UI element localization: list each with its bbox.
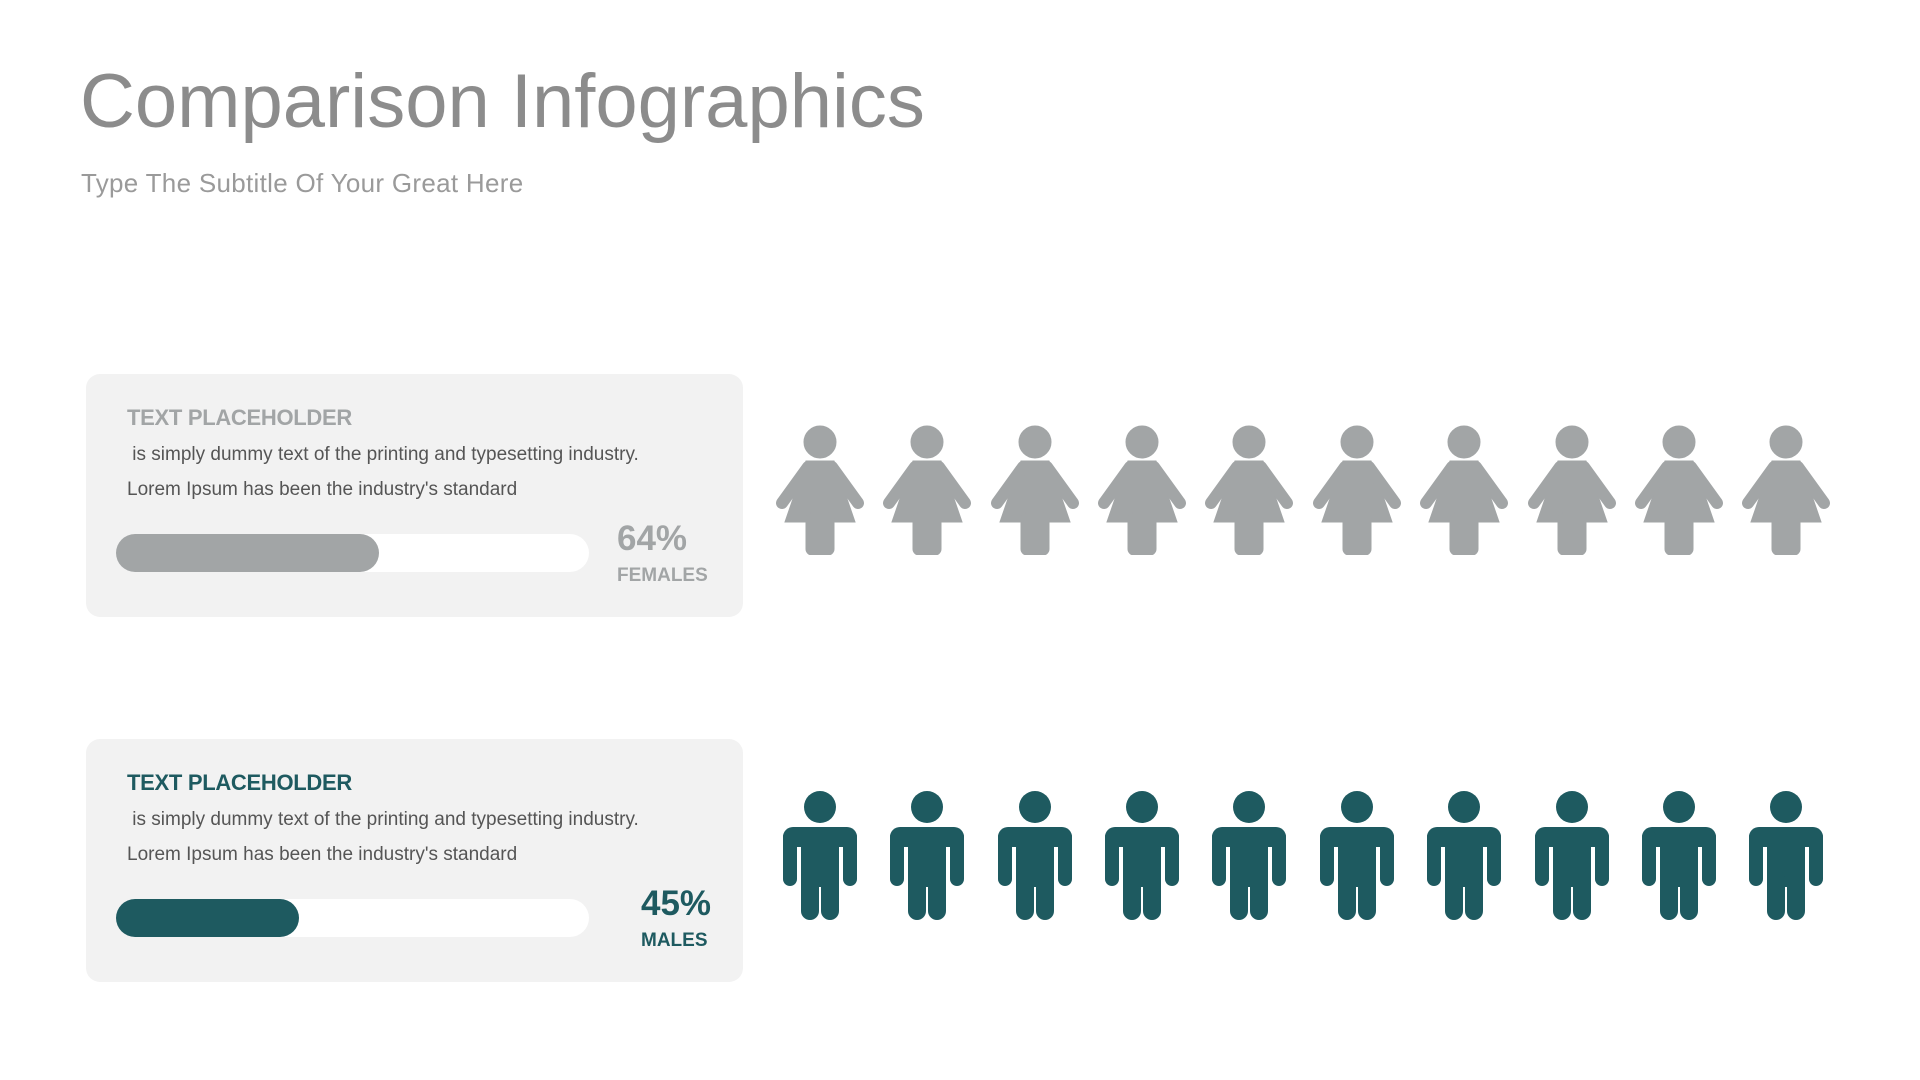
progress bar <box>116 534 589 572</box>
percentage: 45% <box>641 884 711 923</box>
text line 2: Lorem Ipsum has been the industry's standard <box>127 844 517 865</box>
panel: females <box>86 374 743 617</box>
heading: TEXT PLACEHOLDER <box>127 405 352 430</box>
label: FEMALES <box>617 565 708 586</box>
label: MALES <box>641 930 708 951</box>
icon row: females <box>776 426 1830 555</box>
text line 1: is simply dummy text of the printing and typesetting industry. <box>132 809 639 830</box>
text line 2: Lorem Ipsum has been the industry's standard <box>127 479 517 500</box>
percentage: 64% <box>617 519 687 558</box>
icon row: males <box>783 791 1823 920</box>
text line 1: is simply dummy text of the printing and typesetting industry. <box>132 444 639 465</box>
subtitle: Type The Subtitle Of Your Great Here <box>81 168 523 198</box>
heading: TEXT PLACEHOLDER <box>127 770 352 795</box>
panel: males <box>86 739 743 982</box>
title: Comparison Infographics <box>80 59 925 144</box>
progress bar <box>116 899 589 937</box>
